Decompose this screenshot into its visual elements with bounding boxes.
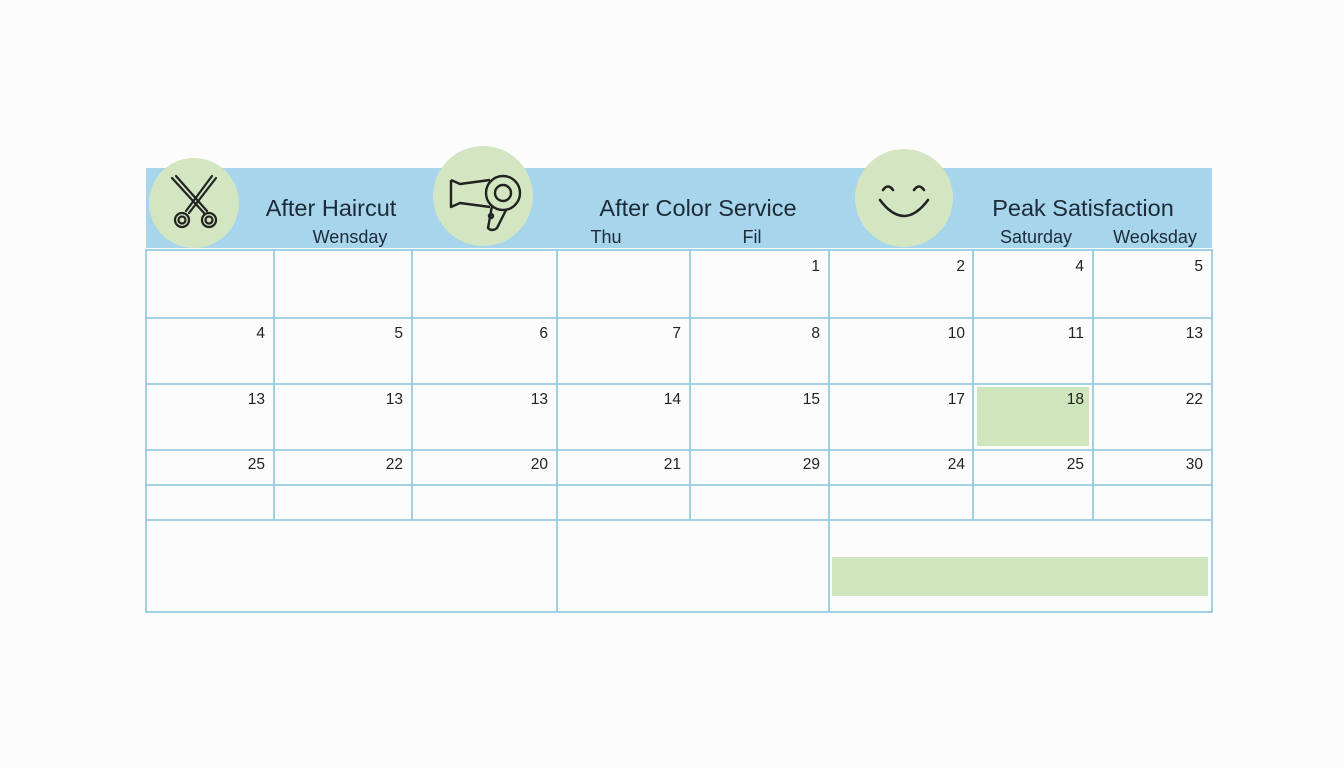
calendar numbers bbox=[248, 258, 1203, 473]
calendar numbers: 20 bbox=[531, 456, 548, 473]
calendar numbers: 13 bbox=[531, 391, 548, 408]
calendar numbers: 6 bbox=[539, 325, 548, 342]
calendar numbers: 1 bbox=[811, 258, 820, 275]
calendar numbers: 4 bbox=[256, 325, 265, 342]
calendar numbers: 13 bbox=[386, 391, 403, 408]
heading: After Color Service: After Color Service bbox=[599, 195, 797, 221]
icon: smiley bbox=[855, 149, 953, 247]
calendar numbers: 8 bbox=[811, 325, 820, 342]
icon: scissors bbox=[149, 158, 239, 248]
heading: Peak Satisfaction: Saturday bbox=[1000, 227, 1072, 247]
calendar numbers: 7 bbox=[672, 325, 681, 342]
calendar numbers: 17 bbox=[948, 391, 965, 408]
heading: Peak Satisfaction bbox=[992, 195, 1197, 247]
calendar numbers: 14 bbox=[664, 391, 681, 408]
calendar numbers: 15 bbox=[803, 391, 820, 408]
calendar numbers: 13 bbox=[1186, 325, 1203, 342]
header band bbox=[146, 168, 1212, 248]
highlight cell 18 bbox=[977, 387, 1089, 446]
calendar numbers: 18 bbox=[1067, 391, 1084, 408]
calendar numbers: 13 bbox=[248, 391, 265, 408]
heading: After Haircut: Wensday bbox=[313, 227, 387, 247]
highlight bar bbox=[832, 557, 1208, 596]
calendar numbers: 10 bbox=[948, 325, 965, 342]
calendar numbers: 29 bbox=[803, 456, 820, 473]
heading: After Color Service: Fil bbox=[742, 227, 762, 247]
calendar numbers: 21 bbox=[664, 456, 681, 473]
heading: After Color Service bbox=[590, 195, 797, 247]
heading: After Color Service: Thu bbox=[590, 227, 622, 247]
calendar numbers: 25 bbox=[248, 456, 265, 473]
calendar numbers: 2 bbox=[956, 258, 965, 275]
heading: After Haircut: After Haircut bbox=[266, 195, 397, 221]
calendar numbers: 22 bbox=[1186, 391, 1203, 408]
calendar numbers: 25 bbox=[1067, 456, 1084, 473]
calendar numbers: 5 bbox=[394, 325, 403, 342]
icon: hair dryer bbox=[433, 146, 533, 246]
calendar numbers: 11 bbox=[1068, 325, 1084, 342]
calendar numbers: 22 bbox=[386, 456, 403, 473]
heading: Peak Satisfaction: Peak Satisfaction bbox=[992, 195, 1174, 221]
heading: Peak Satisfaction: Weoksday bbox=[1113, 227, 1197, 247]
calendar numbers: 5 bbox=[1194, 258, 1203, 275]
calendar numbers: 4 bbox=[1075, 258, 1084, 275]
heading: After Haircut bbox=[266, 195, 397, 247]
calendar numbers: 24 bbox=[948, 456, 965, 473]
calendar numbers: 30 bbox=[1186, 456, 1203, 473]
calendar grid bbox=[146, 250, 1212, 612]
